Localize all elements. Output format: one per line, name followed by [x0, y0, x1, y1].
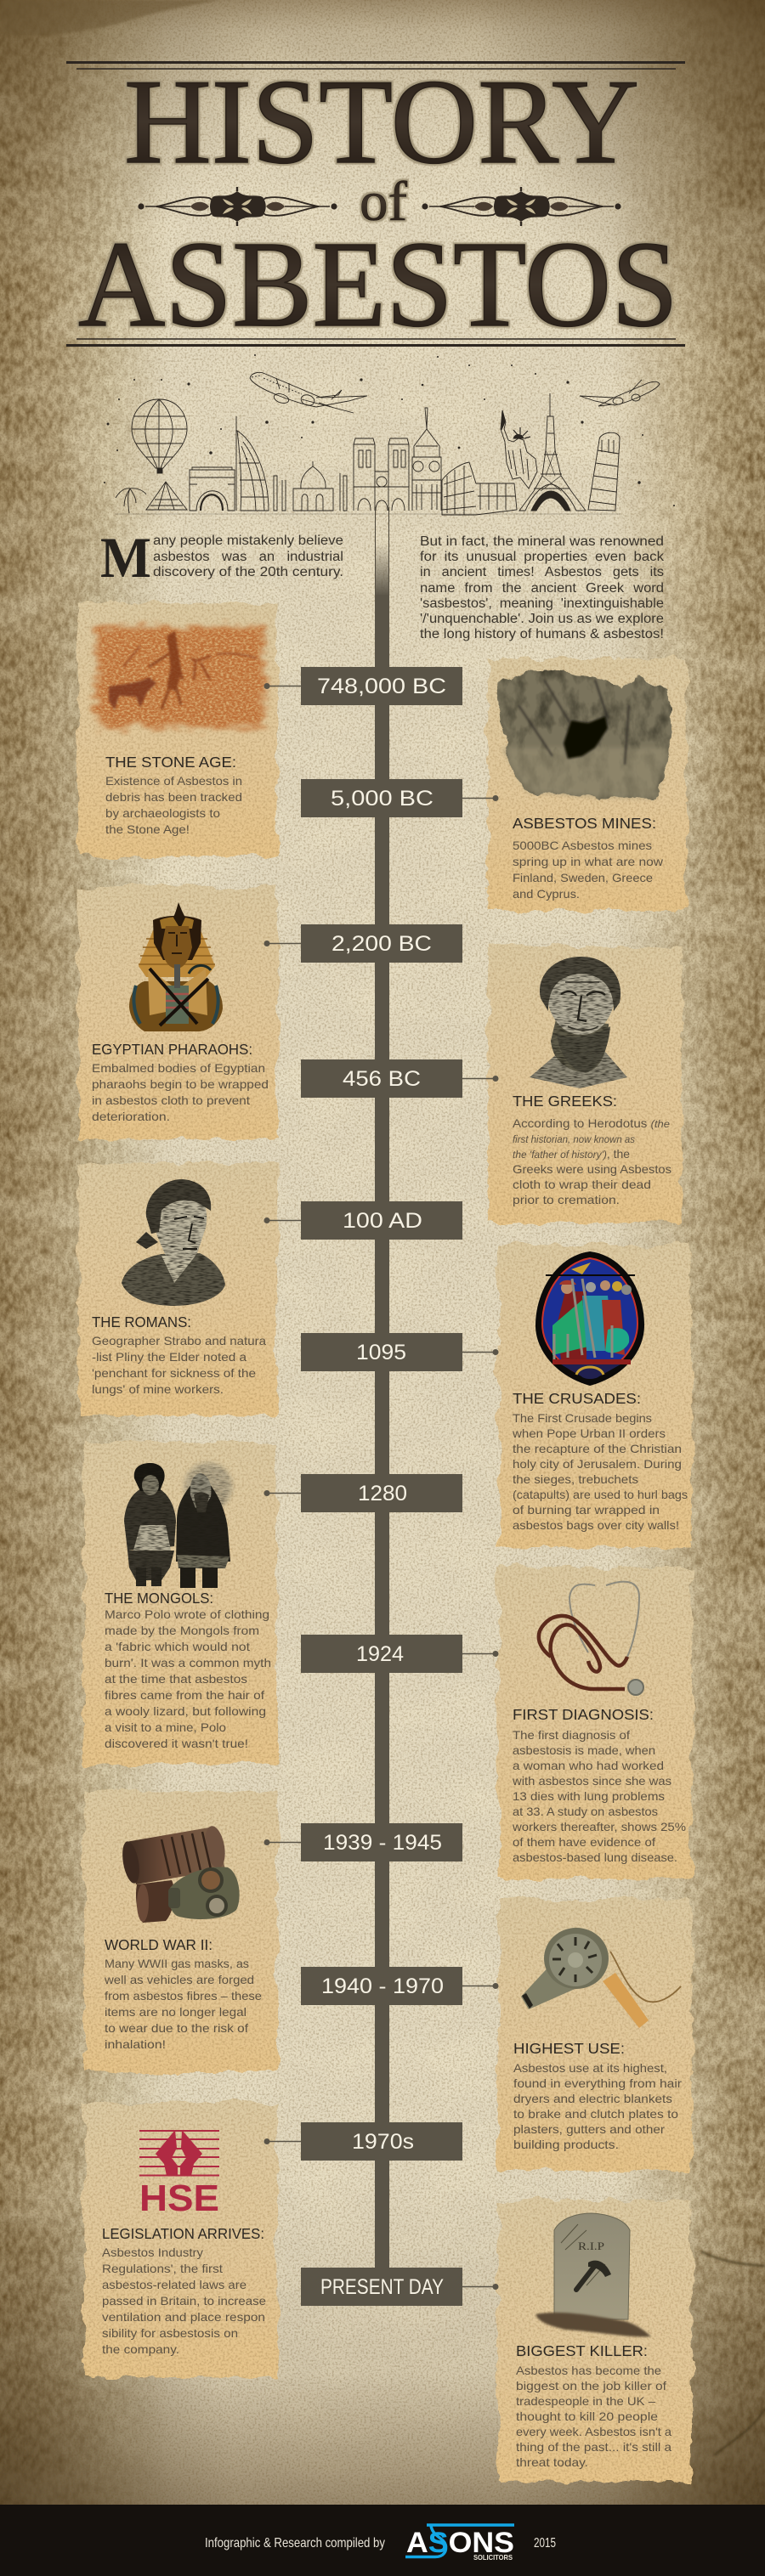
body text: when Pope Urban II orders — [512, 1426, 666, 1440]
intro text left: M — [100, 525, 151, 590]
body text: -list Pliny the Elder noted a — [92, 1350, 246, 1364]
date marker: 100 AD: 100 AD — [343, 1209, 422, 1233]
body text: thought to kill 20 people — [516, 2409, 658, 2423]
icon: large airplane — [250, 372, 367, 413]
body text: 5000BC Asbestos mines — [513, 839, 652, 852]
date marker: 1940 - 1970 — [301, 1967, 498, 2005]
illustration: stethoscope — [539, 1582, 643, 1695]
body text: plasters, gutters and other — [513, 2122, 665, 2136]
footer: 2015 — [534, 2536, 556, 2551]
panel: the stone age — [78, 603, 277, 856]
body text: at 33. A study on asbestos — [513, 1805, 658, 1818]
body text: lungs' of mine workers. — [92, 1382, 224, 1396]
panel: the mongols: THE MONGOLS: — [105, 1590, 213, 1607]
panel: world war II: WORLD WAR II: — [105, 1936, 212, 1953]
body text: The first diagnosis of — [513, 1728, 630, 1742]
illustration: stained glass window — [536, 1251, 644, 1386]
body text — [513, 2061, 682, 2151]
body text: Marco Polo wrote of clothing — [105, 1607, 269, 1621]
body text: 13 dies with lung problems — [513, 1789, 665, 1803]
icon: triumphal arch — [190, 467, 235, 511]
skyline of world landmarks — [104, 354, 675, 515]
intro text right — [420, 534, 664, 641]
body text: to brake and clutch plates to — [513, 2107, 678, 2121]
date marker: 1095: 1095 — [356, 1341, 406, 1364]
date marker: 1939 - 1945 — [264, 1823, 462, 1861]
body text: workers thereafter, shows 25% — [512, 1820, 686, 1833]
intro text right: the long history of humans & asbestos! — [420, 627, 664, 641]
title: HISTORY — [124, 54, 639, 189]
date marker: 2,200 BC: 2,200 BC — [332, 932, 432, 956]
body text — [92, 1334, 266, 1396]
body text: asbestos-related laws are — [102, 2278, 246, 2291]
body text: at the time that asbestos — [105, 1672, 247, 1686]
panel: the crusades: THE CRUSADES: — [513, 1390, 641, 1407]
body text: discovered it wasn't true! — [105, 1737, 248, 1750]
body text: building products. — [513, 2138, 619, 2151]
panel: first diagnosis — [498, 1568, 692, 1878]
icon: Big Ben — [412, 408, 441, 511]
panel: the romans — [78, 1163, 277, 1415]
body text: pharaohs begin to be wrapped — [92, 1077, 269, 1091]
body text — [512, 1728, 686, 1864]
panel: world war II — [84, 1791, 277, 2072]
date marker: 1280 — [264, 1474, 462, 1512]
icon: Eiffel Tower — [519, 393, 586, 511]
body text: by archaeologists to — [105, 806, 220, 820]
intro text left: any people mistakenly believe — [153, 534, 343, 548]
body text: with asbestos since she was — [512, 1774, 672, 1788]
title: of — [360, 171, 407, 233]
panel: legislation arrives — [84, 2103, 277, 2377]
body text: threat today. — [516, 2455, 588, 2469]
body text: Asbestos use at its highest, — [513, 2061, 667, 2075]
body text: deterioration. — [92, 1110, 170, 1123]
body text: every week. Asbestos isn't a — [516, 2425, 672, 2438]
illustration: tombstone with hammer: R.I.P — [578, 2240, 604, 2252]
logo: Asons Solicitors: ASONS — [406, 2527, 514, 2559]
logo: Asons Solicitors: SOLICITORS — [473, 2553, 513, 2562]
body text: tradespeople in the UK – — [516, 2394, 655, 2408]
body text: biggest on the job killer of — [516, 2379, 666, 2392]
body text: a woman who had worked — [513, 1759, 664, 1772]
body text: the company. — [102, 2342, 179, 2356]
body text: asbestos-based lung disease. — [513, 1850, 677, 1864]
body text: Existence of Asbestos in — [105, 774, 242, 788]
icon: HSE logo: HSE — [139, 2178, 219, 2219]
illustration: Roman engraving — [122, 1179, 225, 1306]
intro text left — [100, 525, 343, 590]
icon: Colosseum — [442, 462, 517, 515]
icon: Taj Mahal — [274, 461, 347, 511]
body text: asbestosis is made, when — [513, 1743, 655, 1757]
panel: the greeks — [488, 946, 682, 1223]
body text: Asbestos Industry — [102, 2246, 203, 2259]
icon: small airplane — [580, 380, 660, 406]
date marker: 1940 - 1970: 1940 - 1970 — [321, 1974, 444, 1998]
body text: Finland, Sweden, Greece — [513, 871, 653, 884]
body text: Regulations', the first — [102, 2262, 223, 2275]
intro text right: for its unusual properties even back — [420, 550, 664, 564]
body text — [513, 839, 664, 901]
body text: and Cyprus. — [513, 887, 580, 901]
date marker: 1095 — [301, 1333, 498, 1371]
body text: debris has been tracked — [105, 790, 242, 804]
intro text right: name from the ancient Greek word — [420, 581, 664, 596]
icon: Burj Al Arab — [236, 416, 269, 511]
body text — [105, 774, 242, 836]
body text: Many WWII gas masks, as — [105, 1957, 249, 1970]
intro text right: in ancient times! Asbestos gets its — [420, 565, 664, 579]
body text: burn'. It was a common myth — [105, 1656, 271, 1669]
body text: to wear due to the risk of — [105, 2021, 248, 2035]
body text — [513, 1116, 672, 1206]
title: ASBESTOS — [78, 217, 678, 353]
date marker: present day — [301, 2268, 498, 2306]
illustration: pharaoh bust — [129, 902, 223, 1031]
body text: dryers and electric blankets — [513, 2092, 672, 2105]
illustration: cave painting — [97, 627, 264, 727]
date marker: 1939 - 1945: 1939 - 1945 — [323, 1831, 442, 1855]
icon: HSE logo — [139, 2130, 219, 2219]
body text — [104, 1957, 262, 2051]
illustration: gas mask and canister — [120, 1824, 240, 1923]
body text: The First Crusade begins — [513, 1411, 652, 1425]
panel: first diagnosis: FIRST DIAGNOSIS: — [513, 1706, 654, 1723]
panel: asbestos mines: ASBESTOS MINES: — [513, 815, 656, 832]
icon: Notre Dame — [354, 438, 409, 511]
date marker: 1924: 1924 — [356, 1642, 404, 1666]
intro text right: But in fact, the mineral was renowned — [420, 534, 664, 549]
body text: asbestos bags over city walls! — [513, 1518, 679, 1532]
panel: the stone age: THE STONE AGE: — [105, 754, 236, 771]
body text: sibility for asbestosis on — [102, 2326, 238, 2340]
body text: thing of the past... it's still a — [516, 2440, 672, 2454]
body text: Greeks were using Asbestos — [513, 1162, 672, 1176]
intro text right: '/'unquenchable'. Join us as we explore — [420, 612, 664, 626]
body text: passed in Britain, to increase — [102, 2294, 266, 2308]
intro text left: discovery of the 20th century. — [153, 565, 343, 579]
body text: fibres came from the hair of — [105, 1688, 264, 1702]
body text — [92, 1061, 269, 1123]
body text: spring up in what are now — [513, 855, 664, 868]
date marker: 2,200 BC — [264, 924, 462, 963]
ground line — [115, 513, 620, 515]
icon: palms and pyramid — [116, 482, 187, 513]
panel: biggest killer: BIGGEST KILLER: — [516, 2342, 648, 2359]
date marker: 748,000 BC: 748,000 BC — [317, 675, 446, 698]
footer: Infographic & Research compiled by — [205, 2536, 385, 2551]
illustration: vintage hair dryer — [521, 1928, 681, 2028]
panel: legislation arrives: LEGISLATION ARRIVES: — [102, 2225, 264, 2242]
body text: According to Herodotus (the — [513, 1116, 670, 1130]
ornament left — [138, 187, 337, 226]
body text: ventilation and place respon — [102, 2310, 265, 2324]
panel: highest use: HIGHEST USE: — [513, 2040, 625, 2057]
panel: highest use — [498, 1899, 692, 2171]
body text: a wooly lizard, but following — [105, 1704, 266, 1718]
intro text right: 'sasbestos', meaning 'inextinguishable — [420, 596, 664, 611]
body text: of burning tar wrapped in — [513, 1503, 660, 1517]
illustration: tombstone with hammer — [536, 2213, 651, 2336]
body text: made by the Mongols from — [105, 1624, 259, 1637]
body text: the recapture of the Christian — [513, 1442, 682, 1455]
body text: prior to cremation. — [513, 1193, 620, 1206]
date marker: present day: PRESENT DAY — [320, 2275, 444, 2299]
date marker: 1924 — [301, 1635, 498, 1673]
timeline spine — [375, 507, 389, 2285]
date marker: 1970s — [264, 2122, 462, 2161]
body text — [516, 2364, 672, 2469]
intro text left: asbestos was an industrial — [153, 550, 343, 564]
panel: the romans: THE ROMANS: — [92, 1313, 191, 1330]
body text — [512, 1411, 688, 1532]
ornament right — [422, 187, 621, 226]
body text: first historian, now known as — [513, 1133, 635, 1145]
date marker: 1970s: 1970s — [352, 2130, 414, 2154]
body text: the 'father of history'), the — [513, 1147, 630, 1161]
date marker: 100 AD — [264, 1201, 462, 1240]
date marker: 748,000 BC — [264, 667, 462, 705]
panel: biggest killer — [498, 2200, 692, 2482]
speckles — [104, 354, 675, 506]
illustration: mine cave — [498, 671, 672, 799]
body text: items are no longer legal — [105, 2005, 246, 2019]
panel: the greeks: THE GREEKS: — [513, 1093, 617, 1110]
panel: the mongols — [84, 1442, 277, 1764]
body text: found in everything from hair — [513, 2076, 682, 2090]
body text: (catapults) are used to hurl bags — [513, 1488, 688, 1501]
body text: Asbestos has become the — [516, 2364, 661, 2377]
panel: the crusades — [498, 1245, 692, 1547]
body text: a 'fabric which would not — [105, 1640, 250, 1653]
date marker: 5,000 BC — [301, 779, 498, 817]
icon: Statue of Liberty — [501, 410, 537, 489]
date marker: 456 BC: 456 BC — [343, 1067, 421, 1091]
body text: a visit to a mine, Polo — [105, 1720, 226, 1734]
icon: hot air balloon — [132, 399, 187, 473]
body text: of them have evidence of — [513, 1835, 655, 1849]
body text: in asbestos cloth to prevent — [92, 1093, 250, 1107]
title — [66, 54, 685, 353]
body text — [102, 2246, 266, 2356]
body text: 'penchant for sickness of the — [92, 1366, 256, 1380]
icon: Leaning Tower of Pisa — [588, 432, 620, 511]
date marker: 456 BC — [301, 1059, 498, 1098]
body text: holy city of Jerusalem. During — [513, 1457, 682, 1471]
panel: asbestos mines — [488, 658, 687, 911]
body text: cloth to wrap their dead — [513, 1178, 651, 1191]
body text: Geographer Strabo and natura — [92, 1334, 266, 1347]
body text: Embalmed bodies of Egyptian — [92, 1061, 265, 1075]
illustration: Herodotus bust — [530, 957, 627, 1088]
date marker: 1280: 1280 — [358, 1482, 407, 1505]
body text — [105, 1607, 271, 1750]
date marker: 5,000 BC: 5,000 BC — [331, 787, 434, 811]
footer — [0, 2505, 765, 2576]
body text: well as vehicles are forged — [104, 1973, 254, 1986]
illustration: two Mongol figures — [124, 1463, 232, 1588]
panel: egyptian pharaohs: EGYPTIAN PHARAOHS: — [92, 1041, 252, 1058]
panel: egyptian pharaohs — [78, 887, 277, 1139]
body text: the sieges, trebuchets — [513, 1472, 638, 1486]
body text: inhalation! — [105, 2037, 166, 2051]
body text: the Stone Age! — [105, 822, 190, 836]
body text: from asbestos fibres – these — [105, 1989, 262, 2003]
